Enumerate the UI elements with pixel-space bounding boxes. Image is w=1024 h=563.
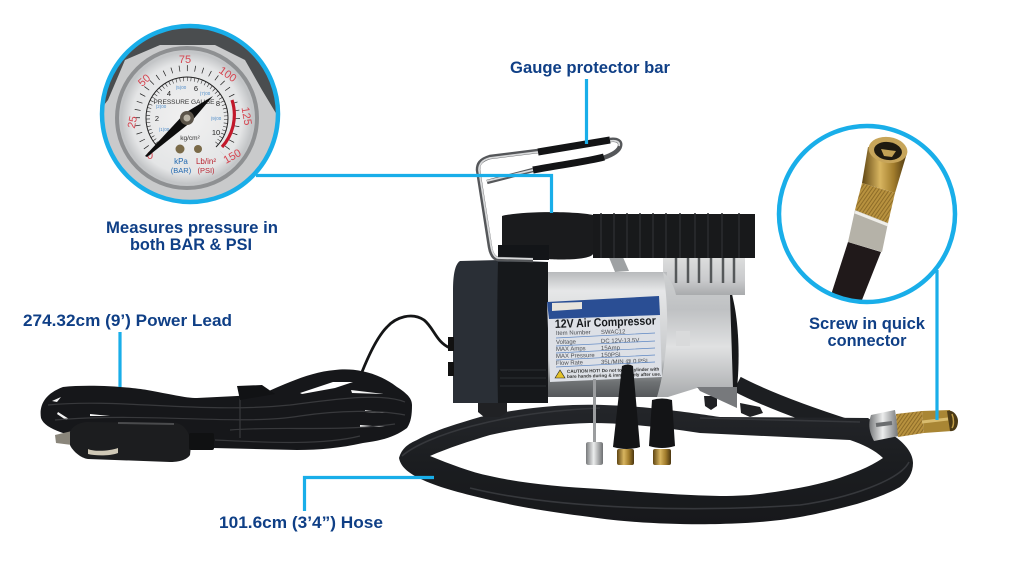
motor front [657, 272, 739, 408]
end connector on hose [869, 410, 958, 441]
product label: 15Amp [601, 345, 621, 352]
gauge housing [502, 212, 593, 259]
gauge numbers: 6 [194, 84, 198, 93]
label: measures pressure: Measures pressure in [106, 218, 278, 237]
product label: 35L/MIN @ 0 PSI [601, 359, 648, 366]
air pipe [608, 255, 629, 272]
compressor [448, 140, 763, 417]
gauge numbers: 10 [212, 128, 220, 137]
label: quick connector: connector [828, 331, 907, 350]
gauge numbers: 100 [216, 65, 238, 85]
gauge numbers: kPa [174, 157, 188, 166]
product label: SWAC12 [601, 329, 626, 336]
product label: 150PSI [601, 352, 621, 359]
gauge numbers: (PSI) [197, 166, 215, 175]
product label: 12V Air Compressor [555, 313, 656, 331]
product label: MAX Pressure [556, 353, 595, 360]
inset: quick connector [779, 126, 955, 305]
needle [145, 96, 213, 157]
gauge numbers: 0 [147, 150, 153, 162]
gauge numbers: PRESSURE GAUGE [153, 99, 215, 106]
rubber bar [593, 213, 755, 258]
accessories: inflation needle and nozzles [586, 364, 675, 465]
gauge numbers: Lb/in² [196, 157, 216, 166]
label: quick connector: Screw in quick [809, 314, 926, 333]
gauge ticks [137, 68, 237, 153]
housing clamp [498, 245, 549, 260]
product label: MAX Amps [556, 346, 586, 353]
product label: Voltage [556, 339, 577, 346]
motor housing [448, 260, 548, 403]
gauge protector bar [478, 140, 620, 260]
label: gauge protector bar: Gauge protector bar [510, 58, 670, 77]
product label: bare hands during & immediately after use. [567, 372, 661, 379]
gauge numbers: (7)00 [200, 91, 211, 96]
product label: DC 12V-13.5V [601, 338, 639, 345]
gauge numbers: 50 [136, 72, 153, 89]
label: hose: 101.6cm (3’4”) Hose [219, 513, 383, 532]
gauge numbers: 75 [179, 54, 191, 66]
label: power lead: 274.32cm (9’) Power Lead [23, 311, 232, 330]
product label: Flow Rate [556, 360, 584, 367]
hose from compressor [737, 384, 850, 428]
cigarette lighter plug [55, 422, 214, 462]
gauge numbers [126, 54, 254, 175]
lead running to compressor [362, 316, 450, 372]
gauge numbers: (BAR) [171, 166, 192, 175]
silver cylinder [545, 272, 667, 397]
hose loop [399, 405, 913, 524]
label: measures pressure: both BAR & PSI [130, 235, 252, 254]
inset: pressure gauge [100, 24, 280, 204]
gauge numbers: (5)00 [176, 85, 187, 90]
gauge numbers: 25 [126, 115, 140, 129]
product label: CAUTION HOT! Do not touch cylinder with [567, 367, 660, 374]
gauge numbers: 4 [167, 89, 171, 98]
product label: Item Number [556, 330, 591, 337]
gauge numbers: 2 [155, 114, 159, 123]
gauge numbers: kg/cm² [180, 135, 201, 142]
gauge numbers: (1)00 [159, 127, 170, 132]
gauge numbers: 125 [239, 106, 254, 126]
callout lines [120, 79, 937, 511]
power lead coil [41, 369, 412, 450]
gauge numbers: (2)00 [156, 104, 167, 109]
gauge numbers: 8 [216, 99, 220, 108]
cylinder head fins [663, 258, 745, 295]
gauge numbers: 150 [222, 147, 243, 167]
product label [547, 296, 662, 382]
gauge numbers: (9)00 [211, 116, 222, 121]
compressor feet [478, 396, 763, 417]
